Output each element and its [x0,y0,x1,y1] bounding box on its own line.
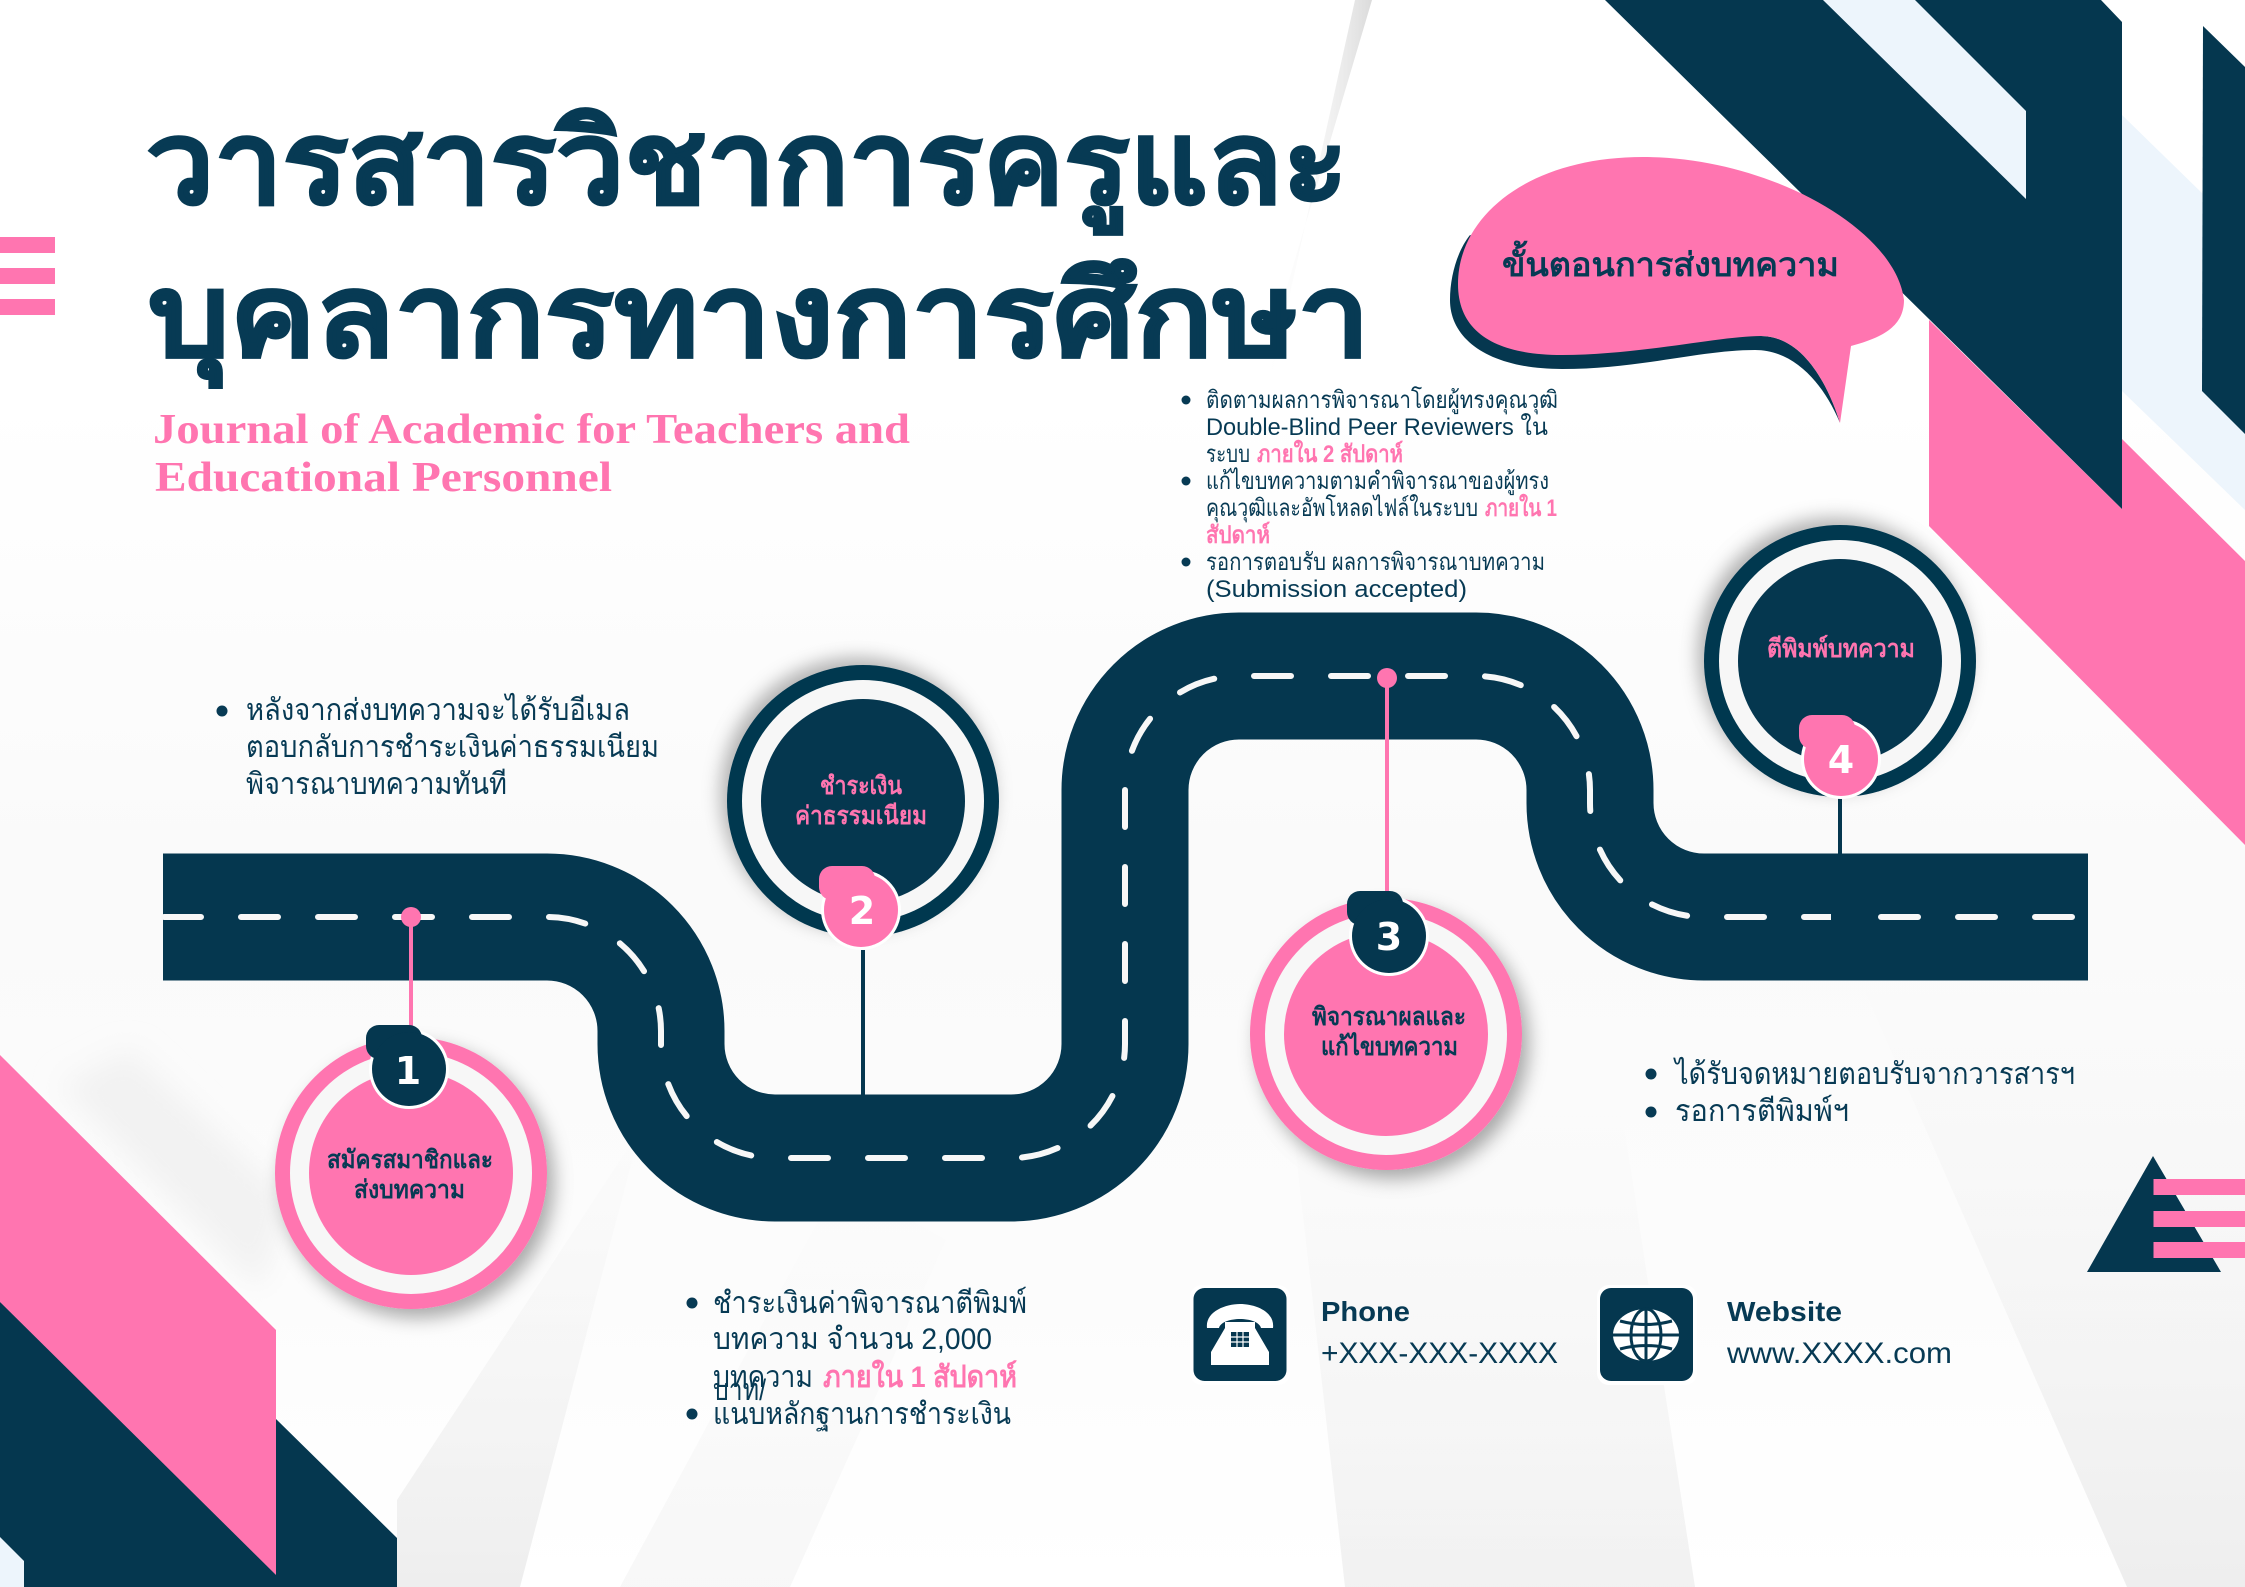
title [146,98,1370,388]
step 2 marker [727,665,999,1096]
contact: phone [1321,1296,1558,1370]
contact: phone: +XXX-XXX-XXXX [1321,1337,1558,1370]
decoration: left pink bars [0,237,55,315]
step 1 marker: 1 [395,1049,421,1093]
step 4 marker: 4 [1828,738,1854,782]
step 3 marker: 3 [1376,915,1402,959]
text block: step 3 details: Double-Blind Peer Reviewers ใน [1206,413,1548,441]
subtitle [153,407,910,501]
speech bubble heading [1450,157,1904,423]
text block: step 3 details: รอการตอบรับ ผลการพิจารณาบทความ [1206,549,1545,576]
step 4 marker [1704,525,1976,855]
speech bubble heading: ขั้นตอนการส่งบทความ [1502,240,1839,283]
road [163,676,2088,1158]
decoration: triangle with pink bars [2087,1156,2245,1272]
step 2 marker: 2 [849,889,875,933]
text block: step 2 details: ชำระเงินค่าพิจารณาตีพิมพ์ [713,1286,1027,1320]
step 3 marker [1250,668,1522,1170]
text block: step 3 details: ภายใน 2 สัปดาห์ [1257,439,1403,468]
step 2 marker: ค่าธรรมเนียม [795,802,927,830]
text block: step 3 details: แก้ไขบทความตามคำพิจารณาของผู้ทรง [1206,467,1549,496]
step 3 marker: พิจารณาผลและ [1312,1003,1466,1031]
step 3 marker: แก้ไขบทความ [1321,1031,1458,1061]
step 1 marker: ส่งบทความ [354,1176,465,1204]
title: วารสารวิชาการครูและ [146,98,1348,235]
text block: step 3 details: คุณวุฒิและอัพโหลดไฟล์ในระบบ [1206,494,1478,523]
subtitle: Journal of Academic for Teachers and [153,407,910,453]
icon: globe [1597,1285,1697,1385]
text block: step 4 details: ได้รับจดหมายตอบรับจากวารสารฯ [1673,1056,2075,1091]
text block: step 1 details: ตอบกลับการชำระเงินค่าธรรมเนียม [246,731,659,764]
title: บุคลากรทางการศึกษา [148,251,1370,388]
decoration: top-right stripes [1605,0,2245,845]
text block: step 2 details [686,1286,1027,1432]
icon: telephone [1190,1285,1290,1385]
text block: step 2 details: บาท/ [713,1374,767,1407]
text block: step 2 details: บทความ จำนวน 2,000 [713,1323,992,1356]
step 1 marker: สมัครสมาชิกและ [327,1146,493,1174]
text block: step 3 details [1182,386,1558,603]
text block: step 2 details: แนบหลักฐานการชำระเงิน [713,1398,1011,1432]
step 4 marker: ตีพิมพ์บทความ [1767,634,1915,663]
decoration: bottom-left stripes [0,1055,397,1587]
step 1 marker [275,907,547,1309]
text block: step 3 details: สัปดาห์ [1206,521,1270,549]
subtitle: Educational Personnel [155,455,612,501]
step 2 marker: ชำระเงิน [820,772,902,800]
text block: step 1 details: พิจารณาบทความทันที [246,768,507,801]
text block: step 4 details [1646,1056,2075,1128]
text block: step 3 details: ระบบ [1206,441,1250,468]
text block: step 2 details: บทความ [713,1361,813,1394]
contact: phone: Phone [1321,1296,1410,1327]
text block: step 4 details: รอการตีพิมพ์ฯ [1675,1094,1849,1128]
text block: step 1 details: หลังจากส่งบทความจะได้รับอีเมล [246,692,630,727]
text block: step 1 details [216,692,659,801]
text block: step 3 details: ภายใน 1 [1485,493,1557,522]
text block: step 3 details: ติดตามผลการพิจารณาโดยผู้ทรงคุณวุฒิ [1206,386,1558,415]
contact: website: www.XXXX.com [1726,1337,1952,1370]
contact: website: Website [1727,1296,1842,1327]
contact: website [1726,1296,1952,1370]
text block: step 3 details: (Submission accepted) [1206,576,1467,603]
text block: step 2 details: ภายใน 1 สัปดาห์ [823,1359,1017,1394]
